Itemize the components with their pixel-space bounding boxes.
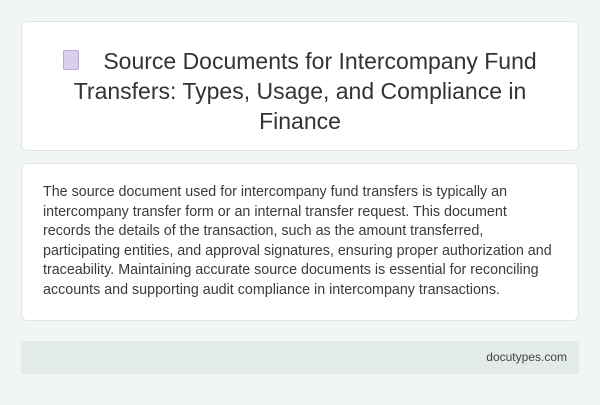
text block: The source document used for intercompany fund transfers is typically an intercompany transfer form or an internal transfer request. This document records the details of the transaction, such as the amount transferred, participating entities, and approval signatures, ensuring proper authorization and traceability. Maintaining accurate source documents is essential for reconciling accounts and supporting audit compliance in intercompany transactions. (43, 184, 552, 298)
icon: document (63, 50, 79, 70)
title: Source Documents for Intercompany Fund Transfers: Types, Usage, and Compliance in Finance (74, 48, 537, 134)
panel: description (21, 163, 579, 321)
footer (21, 341, 579, 374)
panel: title (21, 21, 579, 151)
footer: docutypes.com (486, 350, 567, 364)
